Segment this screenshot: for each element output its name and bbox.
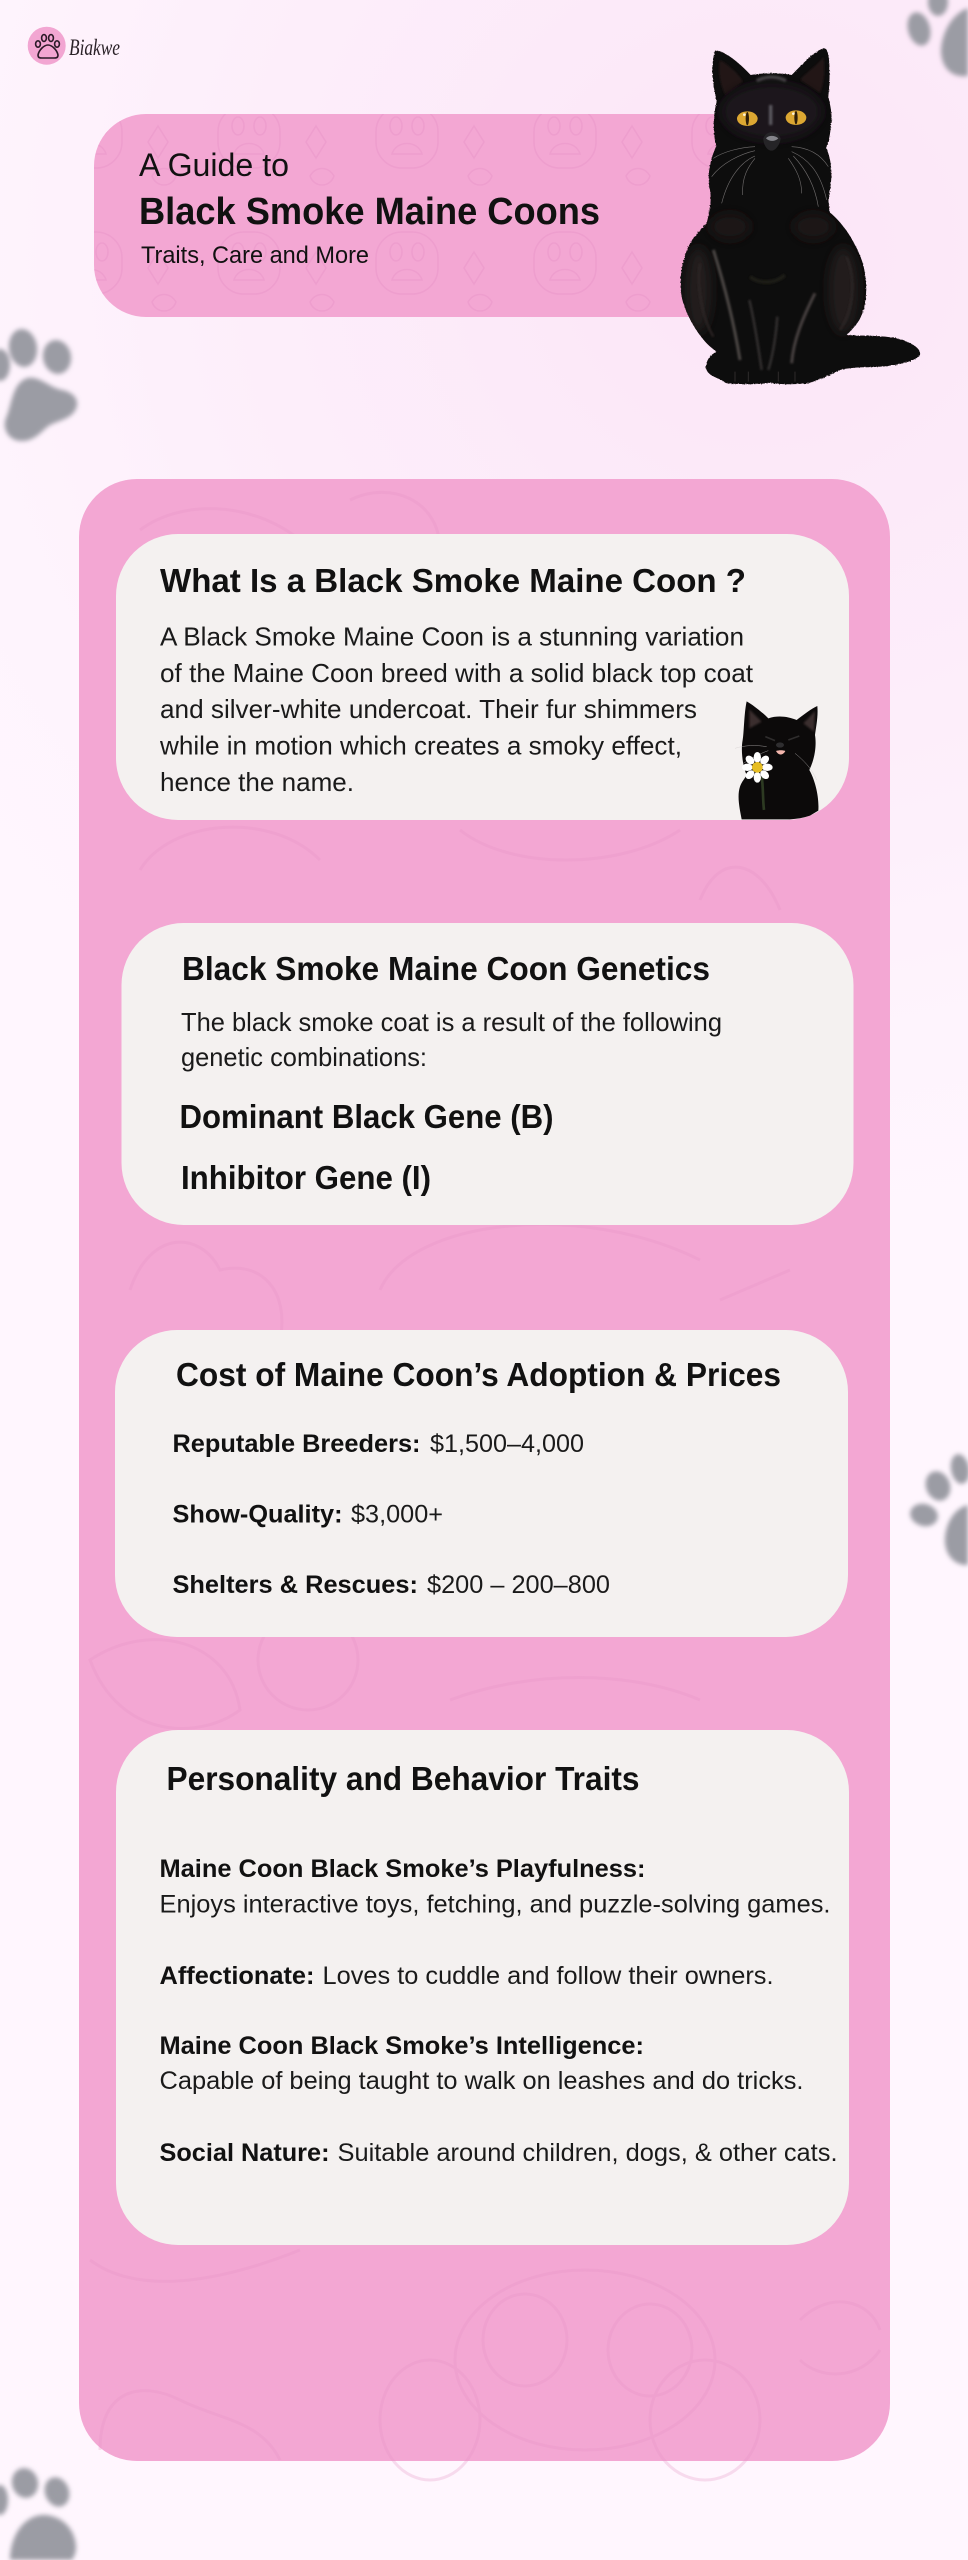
- text: shelters price: Shelters & Rescues:: [172, 1571, 418, 1599]
- text: show-quality price: Show-Quality:: [172, 1500, 342, 1528]
- text: intelligence: [160, 2032, 804, 2095]
- eyes: [737, 111, 758, 126]
- icon: sitting black cat: [681, 48, 920, 384]
- text: playfulness: Enjoys interactive toys, fetching, and puzzle-solving games.: [160, 1890, 831, 1918]
- panel: title banner: [94, 114, 794, 317]
- text: intelligence: Maine Coon Black Smoke’s Intelligence:: [160, 2032, 644, 2060]
- heading: what is: What Is a Black Smoke Maine Coon ?: [160, 562, 746, 599]
- text: genetics intro: [181, 1007, 722, 1072]
- icon: paw top right: [904, 0, 968, 76]
- whiskers: [712, 147, 828, 207]
- text: playfulness: Maine Coon Black Smoke’s Playfulness:: [160, 1855, 646, 1883]
- text: description: hence the name.: [160, 767, 354, 797]
- text: description: A Black Smoke Maine Coon is a stunning variation: [160, 622, 744, 652]
- text: reputable breeders price: $1,500–4,000: [430, 1430, 584, 1458]
- icon: paw bottom left: [0, 2465, 76, 2560]
- icon: logo badge with wordmark: [28, 27, 120, 65]
- text: banner kicker: A Guide to: [139, 147, 289, 183]
- text: description: [159, 622, 754, 797]
- icon: paw right middle: [908, 1453, 968, 1565]
- text: inhibitor gene: Inhibitor Gene (I): [181, 1159, 431, 1196]
- text: show-quality price: [172, 1500, 443, 1528]
- text: affectionate: Loves to cuddle and follow their owners.: [322, 1962, 774, 1990]
- panel: main content: [79, 479, 890, 2480]
- panel: personality and behavior: [116, 1730, 849, 2245]
- heading: cost: Cost of Maine Coon’s Adoption & Prices: [176, 1356, 781, 1393]
- text: description: and silver-white undercoat. Their fur shimmers: [160, 694, 697, 724]
- text: genetics intro: The black smoke coat is a result of the following: [181, 1007, 722, 1037]
- icon: logo badge with wordmark: Biakwe: [69, 35, 120, 60]
- text: intelligence: Capable of being taught to walk on leashes and do tricks.: [160, 2067, 804, 2095]
- text: reputable breeders price: Reputable Breeders:: [172, 1430, 420, 1458]
- text: shelters price: $200 – 200–800: [427, 1571, 610, 1599]
- fur shading: [685, 57, 858, 370]
- heading: main title: Black Smoke Maine Coons: [139, 191, 600, 233]
- text: description: of the Maine Coon breed with a solid black top coat: [160, 658, 754, 688]
- text: playfulness: [160, 1855, 831, 1918]
- icon: small black cat with daisy: [735, 701, 818, 819]
- icon: paw left upper: [0, 327, 77, 441]
- heading: personality: Personality and Behavior Traits: [166, 1760, 640, 1797]
- text: show-quality price: $3,000+: [351, 1500, 443, 1528]
- text: banner subtitle: Traits, Care and More: [141, 242, 369, 269]
- heading: genetics: Black Smoke Maine Coon Genetics: [182, 950, 710, 987]
- text: social nature: Suitable around children, dogs, & other cats.: [338, 2139, 838, 2167]
- text: social nature: Social Nature:: [160, 2139, 330, 2167]
- text: affectionate: Affectionate:: [160, 1962, 314, 1990]
- nose: [763, 132, 781, 151]
- text: shelters price: [172, 1571, 610, 1599]
- text: dominant black gene: Dominant Black Gene (B): [180, 1098, 554, 1135]
- text: description: while in motion which creates a smoky effect,: [159, 730, 682, 760]
- text: reputable breeders price: [172, 1430, 584, 1458]
- panel: what is a black smoke maine coon: [116, 534, 849, 820]
- panel: genetics: [122, 923, 854, 1225]
- text: genetics intro: genetic combinations:: [181, 1042, 427, 1072]
- panel: cost and prices: [115, 1330, 848, 1637]
